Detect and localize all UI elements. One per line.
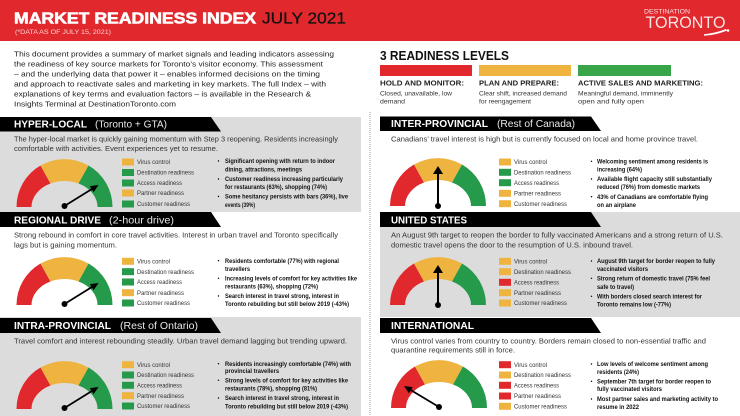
bullet list: Residents comfortable (77%) with regional [225,258,339,265]
heading: international: INTERNATIONAL [391,320,475,332]
gauge: active sales [16,257,112,307]
bullet list: on an airplane [597,202,636,209]
heading: united states: UNITED STATES [391,215,467,227]
legend: Access readiness [137,382,183,390]
legend: Partner readiness [137,290,185,297]
summary text: comfortable with activities. Event experiences yet to resume. [14,144,218,153]
bullet list: Toronto remains low (-77%) [597,302,671,308]
legend: Customer readiness [514,300,568,307]
bullet list [218,361,351,410]
legend [499,258,572,307]
legend: Virus control [137,362,170,369]
bullet list [218,158,348,209]
level: active sales and marketing: open and fully open [578,98,644,106]
readiness levels panel [380,48,703,106]
intro paragraph: – and the underlying data that power it – enables informed decisions on the timing [14,70,320,78]
legend: Access readiness [514,382,560,390]
legend: Destination readiness [137,372,195,379]
bullet list: dining, attractions, meetings [225,166,302,174]
level: plan and prepare: for reengagement [479,98,531,106]
bullet list: Toronto rebuilding but still below 2019 (-43%) [225,404,348,410]
bullet list: safe to travel) [597,284,634,291]
gauge: hold and monitor [391,360,487,410]
heading: intra-provincial: (Rest of Ontario) [120,321,198,332]
summary text: lags but is gaining momentum. [14,240,117,250]
legend: Partner readiness [137,190,185,197]
bullet list [591,361,718,411]
legend: Customer readiness [514,404,568,410]
bullet list: Increasing levels of comfort for key activities like [225,276,357,282]
bullet list: restaurants (78%), shopping (81%) [225,386,317,392]
bullet list: Most partner sales and marketing activity to [597,396,718,403]
summary text: Travel comfort and interest rebounding steadily. Urban travel demand lagging but trending upward. [14,336,347,346]
level: hold and monitor [380,65,472,106]
heading: intra-provincial [0,318,221,333]
legend: Customer readiness [137,300,191,307]
gauge: plan and prepare [390,158,486,209]
bullet list [591,158,712,209]
summary text: Virus control varies from country to country. Borders remain closed to non-essential traffic and [391,336,706,346]
level: active sales and marketing: Meaningful demand, imminently [578,90,674,98]
readiness levels heading: 3 READINESS LEVELS [380,48,509,63]
summary text: The hyper-local market is quickly gaining momentum with Step 3 reopening. Residents increasingly [14,134,338,144]
legend: Destination readiness [137,170,195,177]
bullet list: events (39%) [225,202,255,209]
bullet list: Residents increasingly comfortable (74%) with [225,361,351,368]
heading: united states [380,212,601,227]
level: plan and prepare: PLAN AND PREPARE: [479,80,559,88]
level: plan and prepare: Clear shift, increased demand [479,90,567,98]
legend: Destination readiness [514,372,572,379]
bullet list: With borders closed search interest for [597,294,702,300]
legend: Virus control [514,362,547,369]
bullet list: resume in 2022 [597,404,639,411]
bullet list: travellers [225,266,250,273]
panel: inter-provincial [380,116,712,209]
legend [122,258,195,307]
legend: Access readiness [514,280,560,286]
panel: hyper-local [0,117,361,212]
legend: Partner readiness [514,190,562,198]
bullet list: Search interest in travel strong, interest in [225,395,339,402]
level: active sales and marketing: ACTIVE SALES AND MARKETING: [578,80,703,88]
intro paragraph: Insights Terminal at DestinationToronto.com [14,100,176,108]
level: hold and monitor: demand [380,98,405,106]
legend [122,158,195,208]
intro paragraph: and approach to reactivate sales and marketing in key markets. The full Index – with [14,80,326,88]
logo: Destination Toronto: DESTINATION [644,8,690,16]
legend: Partner readiness [514,393,562,400]
bullet list: Available flight capacity still substantially [597,176,712,183]
header band [0,0,740,41]
bullet list: Customer readiness increasing particularly [225,176,343,183]
level: active sales and marketing [578,65,703,106]
legend: Partner readiness [514,290,562,297]
bullet list: residents (24%) [597,369,639,376]
heading: international [380,318,601,333]
legend: Customer readiness [137,201,191,208]
level: plan and prepare [479,65,571,106]
heading: hyper-local [0,117,221,132]
gauge: plan and prepare [390,257,486,308]
title: MARKET READINESS INDEX [14,10,256,28]
title [14,10,346,28]
legend: Destination readiness [514,170,572,176]
summary text [391,336,706,354]
legend: Virus control [137,258,170,266]
heading: intra-provincial: INTRA-PROVINCIAL [14,320,112,332]
summary text [391,230,723,250]
legend: Destination readiness [514,269,572,276]
heading: inter-provincial: (Rest of Canada) [497,119,575,130]
bullet list: vaccinated visitors [597,266,648,273]
bullet list: Some hesitancy persists with bars (36%), live [225,194,348,200]
logo: Destination Toronto [644,8,729,36]
bullet list [591,258,715,308]
legend: Customer readiness [514,201,568,208]
bullet list: Toronto rebuilding but still below 2019 (-43%) [225,301,349,308]
panel: united states [380,212,740,317]
heading: regional drive [0,212,221,227]
intro paragraph [14,50,334,108]
level: hold and monitor: Closed, unavailable, low [380,90,452,98]
bullet list: Strong levels of comfort for key activities like [225,378,348,384]
heading: regional drive: REGIONAL DRIVE [14,215,101,227]
summary text: Strong rebound in comfort in core travel activities. Interest in urban travel and Toronto specifically [14,230,338,240]
legend [499,158,572,208]
bullet list [218,258,357,308]
bullet list: September 7th target for border reopen to [597,378,711,386]
data date note: (*DATA AS OF JULY 15, 2021) [15,29,111,36]
bullet list: Low levels of welcome sentiment among [597,361,708,368]
panel: international [380,318,718,411]
bullet list: 43% of Canadians are comfortable flying [597,194,708,201]
heading: regional drive: (2-hour drive) [109,216,174,227]
gauge: active sales [16,361,112,411]
bullet list: increasing (64%) [597,166,642,174]
bullet list: Search interest in travel strong, interest in [225,293,339,300]
gauge: active sales [16,159,112,209]
bullet list: restaurants (63%), shopping (72%) [225,284,318,290]
summary text [14,230,338,250]
panel: regional drive [0,212,357,308]
summary text: Canadians’ travel interest is high but is currently focused on local and home province travel. [391,134,698,144]
legend: Partner readiness [137,393,185,400]
heading: inter-provincial: INTER-PROVINCIAL [391,118,489,130]
panel: intra-provincial [0,317,361,416]
title: JULY 2021 [262,10,346,28]
summary text: An August 9th target to reopen the border to fully vaccinated Americans and a strong return of U.S. [391,230,723,240]
bullet list: Welcoming sentiment among residents is [597,158,708,166]
heading: hyper-local: HYPER-LOCAL [14,119,88,131]
bullet list: Significant opening with return to indoor [225,158,335,165]
legend: Virus control [514,159,547,166]
heading: hyper-local: (Toronto + GTA) [95,120,167,131]
intro paragraph: This document provides a summary of market signals and leading indicators assessing [14,50,334,58]
heading: inter-provincial [380,116,601,131]
bullet list: fully vaccinated visitors [597,386,662,393]
legend: Virus control [137,159,170,166]
legend: Access readiness [137,279,183,286]
bullet list: provincial travellers [225,368,279,375]
bullet list: August 9th target for border reopen to fully [597,258,715,265]
intro paragraph: explanations of key terms and evaluation factors – is available in the Research & [14,90,311,98]
legend [122,361,195,410]
legend: Access readiness [137,180,183,187]
intro paragraph: the readiness of key source markets for Toronto’s visitor economy. This assessment [14,60,324,68]
legend: Access readiness [514,180,560,187]
legend: Customer readiness [137,403,191,410]
bullet list: reduced (76%) from domestic markets [597,184,700,191]
summary text: domestic travel opens the door to the resumption of U.S. inbound travel. [391,240,633,250]
summary text [14,134,338,153]
bullet list: for restaurants (63%), shopping (74%) [225,184,327,191]
legend: Destination readiness [137,269,195,276]
legend: Virus control [514,258,547,266]
legend [499,361,572,410]
level: hold and monitor: HOLD AND MONITOR: [380,80,464,88]
logo: Destination Toronto: TORONTO [646,14,726,32]
bullet list: Strong return of domestic travel (75% feel [597,276,710,282]
summary text: quarantine requirements still in force. [391,346,515,354]
